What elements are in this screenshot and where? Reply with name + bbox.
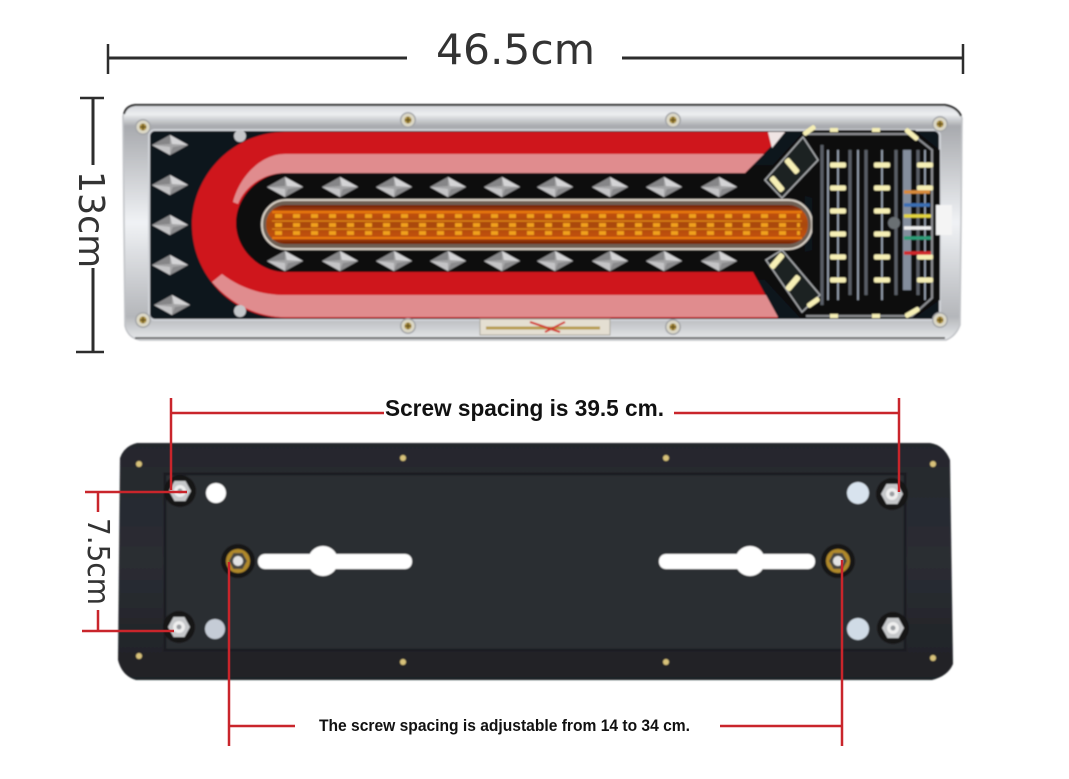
mounting plate <box>118 443 953 680</box>
amber turn signal bar <box>262 200 812 249</box>
dimension: vertical screw spacing 7.5cm: 7.5cm <box>80 518 115 605</box>
arrow LED strips <box>769 124 920 319</box>
right keyhole slot <box>659 546 815 576</box>
lamp top edge <box>124 105 961 116</box>
coloured wires <box>904 192 931 253</box>
dimension: overall height 13cm: 13cm <box>70 171 111 268</box>
left keyhole slot <box>258 546 412 576</box>
reflector diamonds: left column <box>152 135 190 315</box>
lamp bottom edge <box>135 337 945 339</box>
dimension: overall width 46.5cm: 46.5cm <box>436 25 595 74</box>
plate recess <box>165 474 905 650</box>
dimension: screw spacing 39.5 cm <box>171 395 899 492</box>
plate rivets <box>136 455 936 665</box>
mounting bolts <box>163 475 909 644</box>
dimension: vertical screw spacing 7.5cm <box>80 492 187 631</box>
dimension: screw spacing 39.5 cm: Screw spacing is 39.5 cm. <box>385 395 664 421</box>
reflector diamonds: top row <box>267 177 737 197</box>
housing screws <box>135 112 948 335</box>
red U light band <box>192 132 785 318</box>
lamp center black field <box>215 165 805 280</box>
reverse LED columns <box>830 162 933 282</box>
dimension: overall width 46.5cm <box>108 25 963 74</box>
dimension: overall height 13cm <box>70 98 111 352</box>
plate holes <box>205 482 869 640</box>
dimension: adjustable screw spacing 14 to 34 cm: The screw spacing is adjustable from 14 to 34 cm. <box>319 716 690 735</box>
tail light front view <box>123 105 962 340</box>
dimension: adjustable screw spacing 14 to 34 cm <box>229 560 842 746</box>
arrow and reverse light module <box>760 124 952 319</box>
lamp housing <box>123 105 962 340</box>
bottom connector clip <box>480 319 610 335</box>
reflector diamonds: bottom row <box>267 251 737 271</box>
lamp inner panel <box>149 130 940 320</box>
